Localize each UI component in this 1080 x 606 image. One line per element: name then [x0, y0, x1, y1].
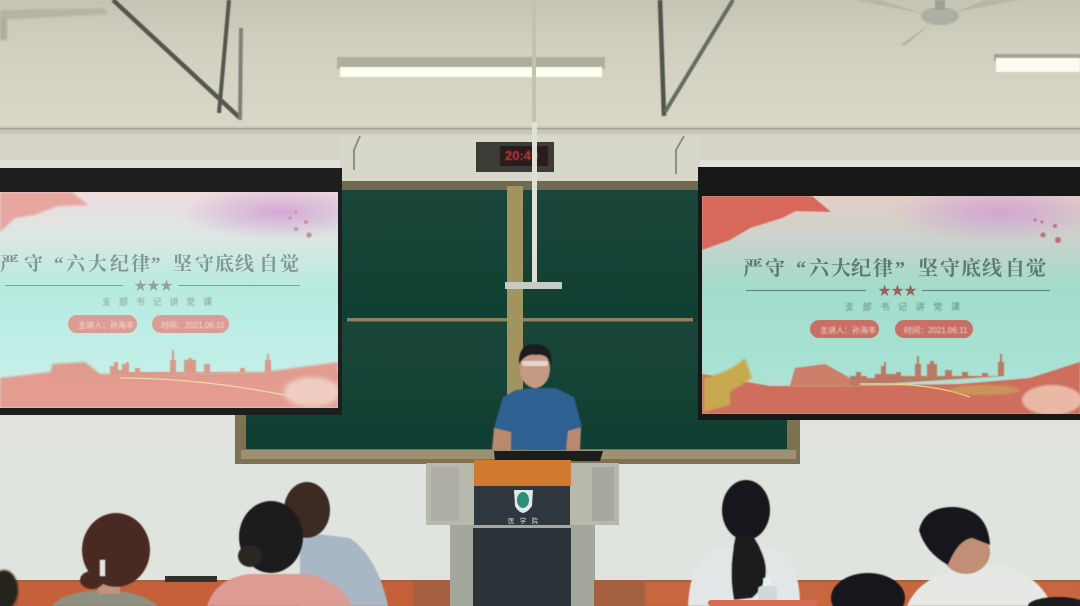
- blackboard: [235, 181, 800, 464]
- water bottle: [758, 578, 777, 606]
- projector pole and mount: [505, 0, 562, 289]
- teacher shirt: [494, 388, 582, 450]
- digital clock: 20:49: [505, 148, 538, 163]
- right slide divider with stars: ★★★: [878, 283, 917, 298]
- student center right: [831, 573, 905, 606]
- floor baseboard: [0, 580, 1080, 606]
- fluorescent light center: [337, 57, 605, 77]
- digital clock: [476, 142, 554, 172]
- board frame: [235, 415, 800, 464]
- right slide presenter pill: 主讲人：孙海丰: [820, 325, 876, 335]
- left slide presenter pill: 主讲人：孙海丰: [78, 320, 134, 330]
- right slide date pill: [895, 320, 973, 338]
- student in pink: [207, 501, 351, 606]
- left slide date pill: [152, 315, 229, 333]
- left slide title: 严守“六大纪律”坚守底线自觉: [0, 252, 299, 275]
- student far left: [0, 570, 18, 606]
- student in white shirt: [907, 507, 1052, 606]
- lectern monitor: [494, 451, 603, 461]
- ceiling fan right: [855, 0, 1020, 45]
- lectern logo: [508, 490, 538, 525]
- speaker teacher: [492, 344, 582, 450]
- ceiling struts right: [660, 0, 733, 116]
- lectern orange top: [474, 460, 571, 486]
- desk items: [165, 576, 217, 582]
- board rails: [347, 318, 693, 322]
- lectern logo: 医学院: [508, 516, 538, 525]
- left projection screen: [0, 168, 380, 415]
- lectern lower column: [450, 525, 595, 606]
- right slide date pill: 时间：2021.06.11: [904, 325, 968, 335]
- ceiling struts left: [113, 0, 241, 120]
- pink chair back: [708, 600, 818, 606]
- right slide title: 严守“六大纪律”坚守底线自觉: [743, 256, 1046, 280]
- student far right: [1028, 597, 1080, 606]
- board surface: [342, 190, 698, 330]
- lectern side wings: [426, 463, 619, 525]
- teacher arms: [492, 425, 512, 450]
- lectern dark panel: [474, 486, 570, 528]
- fluorescent light right: [994, 54, 1080, 72]
- ceiling fan left: [0, 8, 108, 40]
- student with bun hair: [52, 513, 158, 606]
- duct brackets: [354, 136, 684, 174]
- left desk: [18, 582, 413, 606]
- left slide divider with stars: ★★★: [134, 278, 173, 293]
- left slide presenter pill: [68, 315, 137, 333]
- right slide subtitle: 支部书记讲党课: [845, 301, 960, 312]
- left slide date pill: 时间：2021.06.11: [161, 320, 225, 330]
- right projection screen: [698, 167, 1080, 420]
- left slide subtitle: 支部书记讲党课: [102, 296, 212, 307]
- student with ponytail: [688, 480, 800, 606]
- right slide presenter pill: [810, 320, 879, 338]
- lectern: [426, 451, 619, 606]
- student behind, blue shirt: [284, 482, 388, 606]
- right desk: [645, 582, 1080, 606]
- teacher head: [520, 350, 550, 388]
